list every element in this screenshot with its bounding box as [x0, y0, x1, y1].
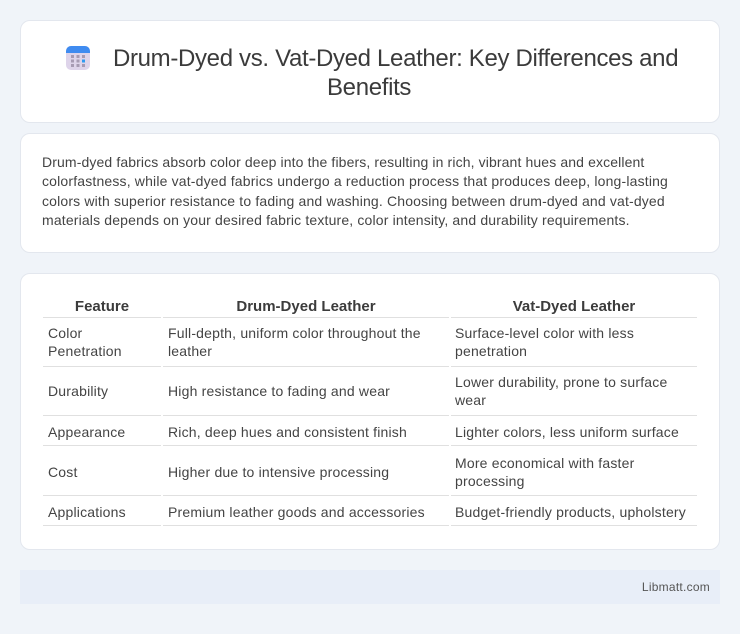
- row: color penetration: Full-depth, uniform color throughout the: [168, 325, 421, 341]
- summary text: materials depends on your desired fabric texture, color intensity, and durability requirements.: [42, 212, 630, 228]
- title card: [20, 20, 720, 123]
- panel: comparison table: [20, 273, 720, 550]
- row: durability: Lower durability, prone to surface: [455, 374, 667, 390]
- row: color penetration: penetration: [455, 343, 527, 359]
- row: durability: [48, 374, 667, 408]
- summary text: colors with superior resistance to fading and washing. Choosing between drum-dyed and vat-dyed: [42, 193, 665, 209]
- row: applications: [48, 504, 686, 520]
- summary text: Drum-dyed fabrics absorb color deep into the fibers, resulting in rich, vibrant hues and excellent: [42, 154, 644, 170]
- row: cost: processing: [455, 473, 525, 489]
- icon: calendar: [66, 46, 90, 70]
- row: color penetration: Color: [48, 325, 82, 341]
- row: color penetration: [48, 325, 634, 359]
- title: [113, 45, 678, 101]
- row: durability: High resistance to fading and wear: [168, 383, 390, 399]
- row: color penetration: leather: [168, 343, 212, 359]
- text: Drum-Dyed vs. Vat-Dyed Leather: Key Differences and: [113, 45, 678, 72]
- row: cost: More economical with faster: [455, 455, 634, 471]
- row: durability: Durability: [48, 383, 108, 399]
- row: appearance: Rich, deep hues and consistent finish: [168, 424, 407, 440]
- row: appearance: [48, 424, 679, 440]
- summary text: colorfastness, while vat-dyed fabrics undergo a reduction process that produces deep, long-lasting: [42, 173, 668, 189]
- summary text: [42, 154, 668, 228]
- footer: [20, 570, 720, 604]
- panel: comparison table: Drum-Dyed Leather: [236, 298, 376, 315]
- row: appearance: Appearance: [48, 424, 125, 440]
- panel: summary: [20, 133, 720, 253]
- row: appearance: Lighter colors, less uniform surface: [455, 424, 679, 440]
- text: Benefits: [327, 74, 411, 101]
- row: applications: Budget-friendly products, upholstery: [455, 504, 686, 520]
- row: durability: wear: [455, 392, 486, 408]
- row: applications: Applications: [48, 504, 126, 520]
- row: cost: Higher due to intensive processing: [168, 464, 389, 480]
- row: color penetration: Penetration: [48, 343, 122, 359]
- footer source: Libmatt.com: [642, 580, 710, 594]
- panel: comparison table: Vat-Dyed Leather: [513, 298, 635, 315]
- table header: Feature: [75, 298, 129, 315]
- row: applications: Premium leather goods and accessories: [168, 504, 425, 520]
- row: color penetration: Surface-level color with less: [455, 325, 634, 341]
- row: cost: [48, 455, 634, 489]
- row: cost: Cost: [48, 464, 78, 480]
